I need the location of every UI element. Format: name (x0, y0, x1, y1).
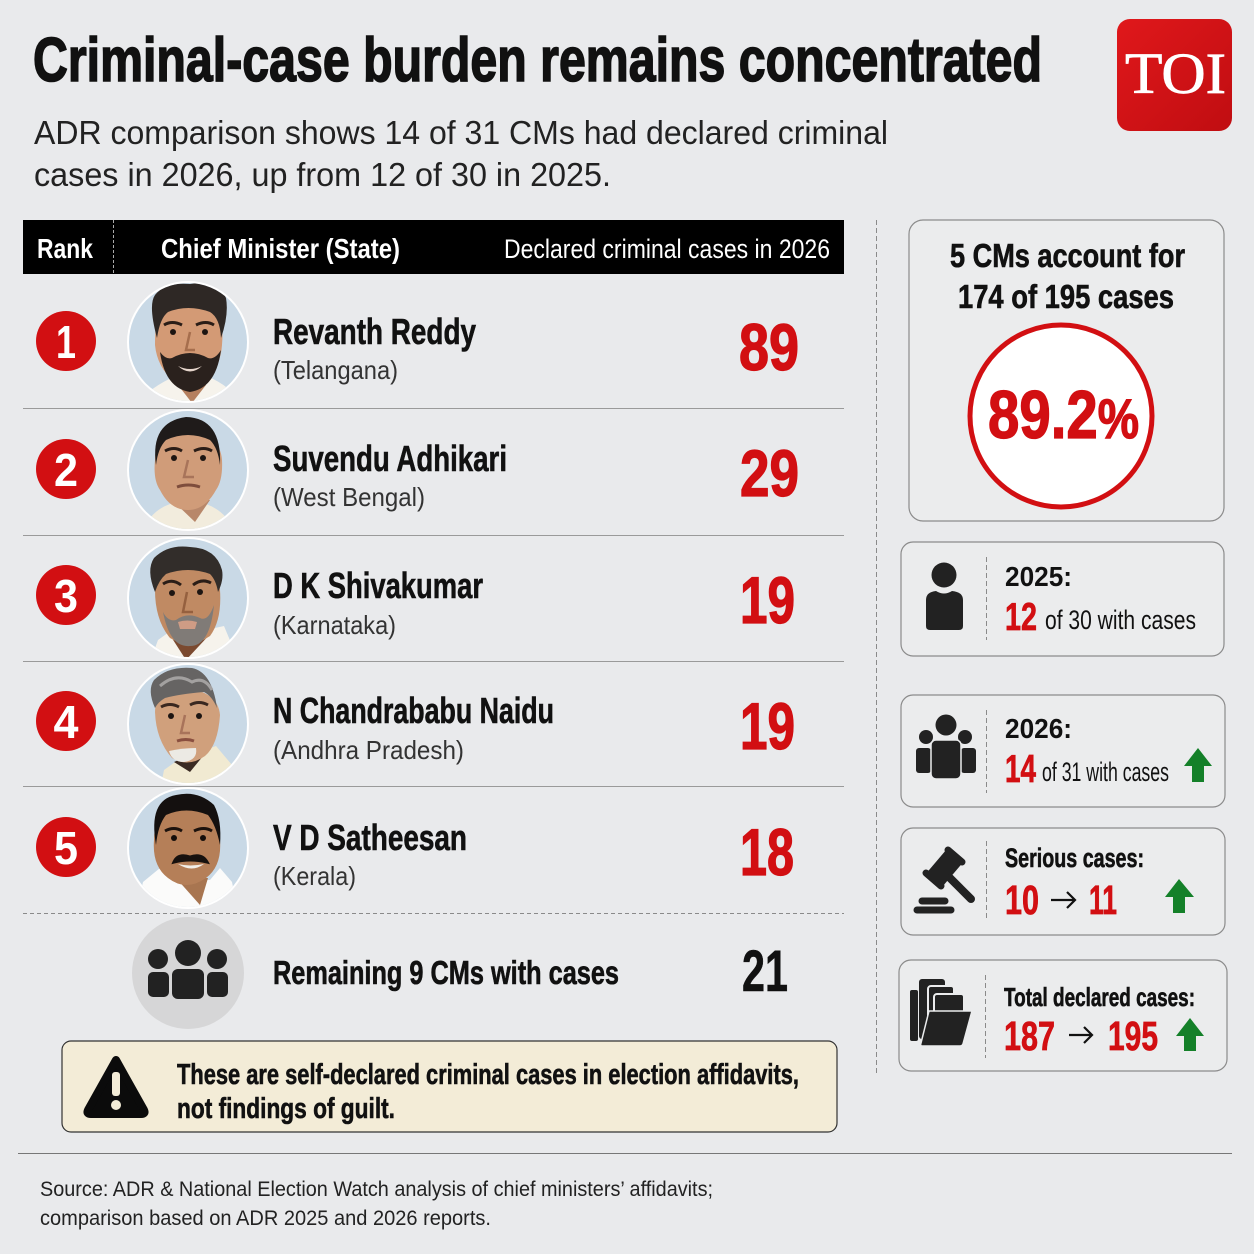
row: Remaining CMs (132, 917, 788, 1029)
state: (Karnataka) (273, 610, 396, 640)
panel: concentration stat: 174 of 195 cases (958, 278, 1174, 315)
panel: serious cases (901, 828, 1225, 935)
rank badge 3 (36, 565, 96, 625)
rank badge 3: 3 (54, 570, 78, 622)
label: Remaining 9 CMs with cases (273, 954, 619, 991)
row: Revanth Reddy (36, 281, 799, 410)
value: 12 (1005, 596, 1037, 639)
value: 29 (740, 436, 799, 510)
warning note: not findings of guilt. (177, 1093, 395, 1125)
subtitle (34, 114, 888, 193)
arrow: to (1069, 1027, 1092, 1043)
warning note (62, 1041, 837, 1132)
source (40, 1178, 713, 1230)
value: 19 (740, 563, 795, 637)
arrow: up (1176, 1018, 1204, 1051)
logo: TOI: TOI (1125, 41, 1226, 106)
value: 14 (1005, 748, 1036, 791)
rank badge 4 (36, 691, 96, 751)
label: 2025: (1005, 561, 1072, 592)
panel: concentration stat (909, 220, 1224, 521)
table header (23, 220, 844, 274)
state: (West Bengal) (273, 482, 425, 512)
name: Suvendu Adhikari (273, 438, 507, 479)
rank badge 5: 5 (54, 822, 78, 874)
note text: These are self-declared criminal cases in election affidavits, (177, 1059, 799, 1091)
icon: folders (910, 979, 972, 1046)
name: Revanth Reddy (273, 311, 476, 352)
row: D K Shivakumar (36, 537, 795, 662)
state: (Andhra Pradesh) (273, 735, 464, 765)
state: (Kerala) (273, 861, 356, 891)
portrait: D K Shivakumar (127, 537, 249, 662)
percentage ring: 89.2% (988, 377, 1139, 453)
rank badge 1: 1 (56, 316, 76, 368)
panel: 2025: of 30 with cases (1045, 605, 1196, 635)
percentage ring (970, 325, 1152, 507)
source: Source: ADR & National Election Watch analysis of chief ministers’ affidavits; (40, 1178, 713, 1201)
icon: person (926, 562, 963, 630)
panel: 2026: of 31 with cases (1042, 757, 1169, 787)
name: D K Shivakumar (273, 565, 483, 606)
state: (Telangana) (273, 355, 398, 385)
value: 19 (740, 689, 795, 763)
portrait: Revanth Reddy (127, 281, 249, 410)
value: 187 (1004, 1013, 1055, 1059)
value: 21 (742, 939, 788, 1004)
panel: 2025 (901, 542, 1224, 656)
portrait: N Chandrababu Naidu (127, 663, 249, 790)
value: 10 (1005, 877, 1039, 923)
table header: Rank (37, 233, 93, 264)
rank badge 5 (36, 817, 96, 877)
source: comparison based on ADR 2025 and 2026 reports. (40, 1207, 491, 1230)
value: 18 (740, 815, 794, 889)
panel: 2026 (901, 695, 1225, 807)
portrait: Suvendu Adhikari (127, 409, 249, 535)
arrow: up (1184, 748, 1212, 782)
panel: total declared cases (899, 960, 1227, 1071)
portrait: V D Satheesan (127, 787, 249, 912)
name: V D Satheesan (273, 817, 467, 858)
row: Suvendu Adhikari (36, 409, 799, 535)
subtitle: cases in 2026, up from 12 of 30 in 2025. (34, 156, 611, 193)
value: 89 (739, 310, 799, 384)
rank badge 1 (36, 311, 96, 371)
icon: gavel (917, 850, 971, 910)
icon: group (916, 714, 976, 779)
icon: group (132, 917, 244, 1029)
panel: serious cases: 11 (1089, 877, 1117, 923)
rank badge 2 (36, 439, 96, 499)
arrow: up (1165, 879, 1194, 913)
icon: warning triangle (87, 1060, 145, 1114)
subtitle: ADR comparison shows 14 of 31 CMs had declared criminal (34, 114, 888, 151)
arrow: to (1051, 892, 1075, 908)
panel: total declared cases: 195 (1108, 1013, 1158, 1059)
table header: Chief Minister (State) (161, 233, 400, 264)
heading: 5 CMs account for (950, 237, 1185, 274)
row: V D Satheesan (36, 787, 794, 912)
name: N Chandrababu Naidu (273, 690, 554, 731)
logo: TOI (1117, 19, 1232, 131)
rank badge 2: 2 (54, 444, 78, 496)
label: 2026: (1005, 713, 1072, 744)
label: Serious cases: (1005, 843, 1144, 873)
rank badge 4: 4 (54, 696, 79, 748)
table header: Declared criminal cases in 2026 (504, 234, 830, 264)
row: N Chandrababu Naidu (36, 663, 795, 790)
